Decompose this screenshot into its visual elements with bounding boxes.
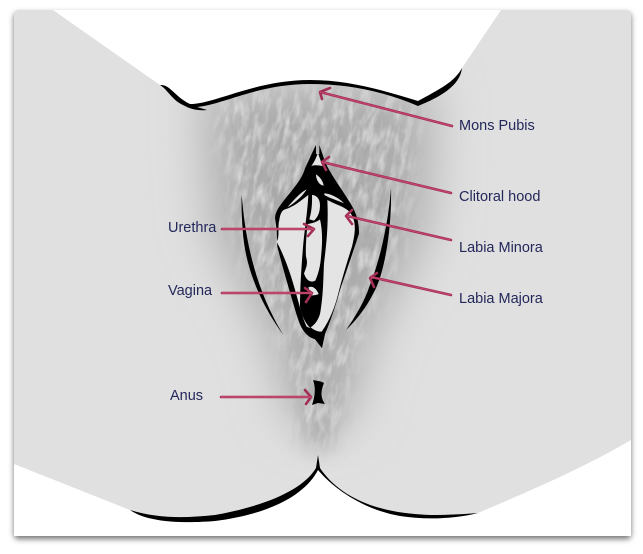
background cut-out: lower white area: [14, 440, 631, 536]
arrow: anus: [221, 390, 311, 404]
vaginal opening highlight: [308, 287, 319, 295]
shaded skin area: [182, 84, 454, 460]
arrow: labia minora: [346, 210, 451, 240]
arrows: [221, 88, 452, 404]
vulva silhouette: [275, 145, 359, 348]
label: Anus: Anus: [170, 388, 203, 404]
arrow: urethra: [222, 224, 314, 236]
arrow: labia majora: [370, 273, 451, 295]
label: Clitoral hood: Clitoral hood: [459, 189, 540, 205]
labia minora: left fold: [277, 189, 311, 328]
hood detail: [316, 174, 324, 186]
anus: [312, 380, 325, 405]
arrow: vagina: [222, 288, 312, 302]
background cut-out: upper white area: [53, 10, 501, 105]
label: Labia Majora: Labia Majora: [459, 291, 544, 307]
label: Labia Minora: Labia Minora: [459, 240, 544, 256]
vestibule: [304, 219, 322, 282]
label: Vagina: Vagina: [168, 283, 213, 299]
outline: top contour: [160, 68, 462, 110]
label: Mons Pubis: Mons Pubis: [459, 118, 535, 134]
arrow: clitoral hood: [322, 157, 451, 193]
clitoral hood highlight: [311, 153, 323, 166]
labia minora: right fold: [311, 193, 355, 332]
urethra area: [309, 195, 320, 221]
outline: bottom contour: [130, 455, 478, 522]
labia majora: right line: [346, 188, 391, 330]
label: Urethra: Urethra: [168, 220, 217, 236]
anatomy drawing: [242, 145, 391, 348]
labia majora: left line: [242, 195, 283, 335]
arrow: mons pubis: [320, 88, 452, 126]
